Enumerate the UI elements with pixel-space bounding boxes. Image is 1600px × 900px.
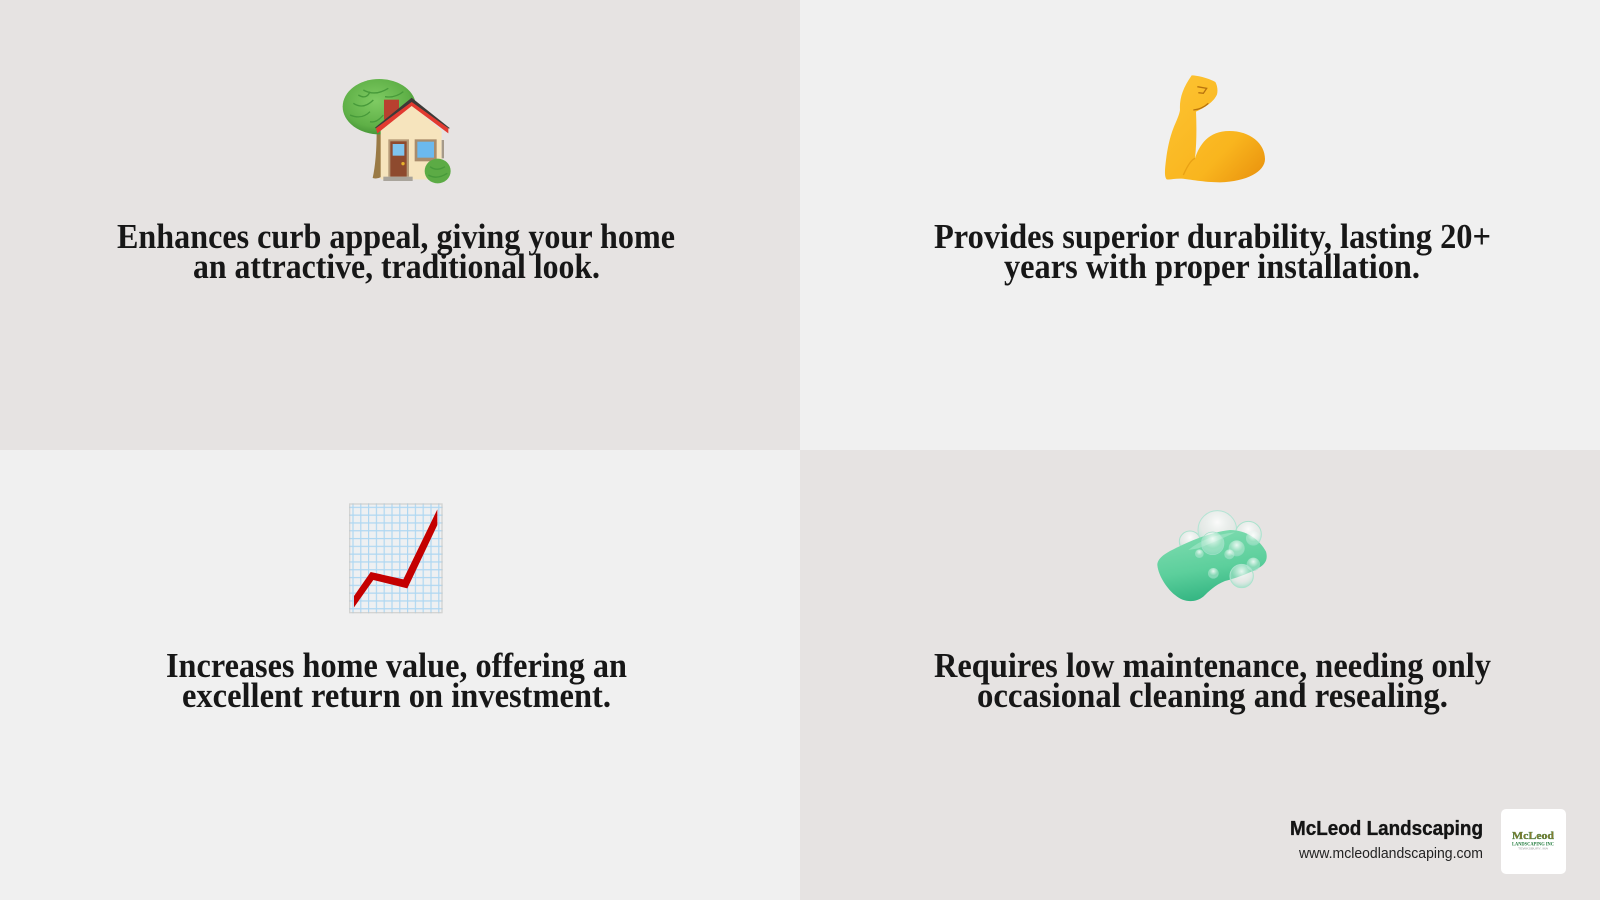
panel: home value [0, 450, 800, 900]
brand name: McLeod Landscaping [1290, 818, 1483, 840]
panel: durability [800, 0, 1600, 450]
logo: TEWKSBURY, MA [1518, 846, 1548, 850]
brand url: www.mcleodlandscaping.com [1298, 846, 1483, 862]
logo: LANDSCAPING INC [1512, 842, 1554, 848]
icon: soap with bubbles [1157, 511, 1267, 601]
icon: house with tree [343, 79, 451, 183]
icon: rising chart [349, 503, 443, 613]
heading: durability: Provides superior durability, lasting 20+ [934, 217, 1491, 256]
heading: low maintenance: Requires low maintenance, needing only [934, 646, 1491, 685]
panel: curb appeal [0, 0, 800, 450]
logo: McLeod [1512, 831, 1554, 842]
icon: flexed biceps [1165, 75, 1265, 182]
heading: low maintenance: occasional cleaning and resealing. [977, 676, 1448, 715]
logo [1501, 809, 1566, 874]
heading: curb appeal: an attractive, traditional look. [193, 247, 600, 286]
heading: home value: excellent return on investment. [182, 676, 611, 715]
heading: durability: years with proper installation. [1004, 247, 1420, 286]
heading: home value: Increases home value, offering an [166, 646, 627, 685]
panel: low maintenance [800, 450, 1600, 900]
footer: brand block [1290, 809, 1566, 874]
heading: curb appeal: Enhances curb appeal, giving your home [117, 217, 675, 256]
